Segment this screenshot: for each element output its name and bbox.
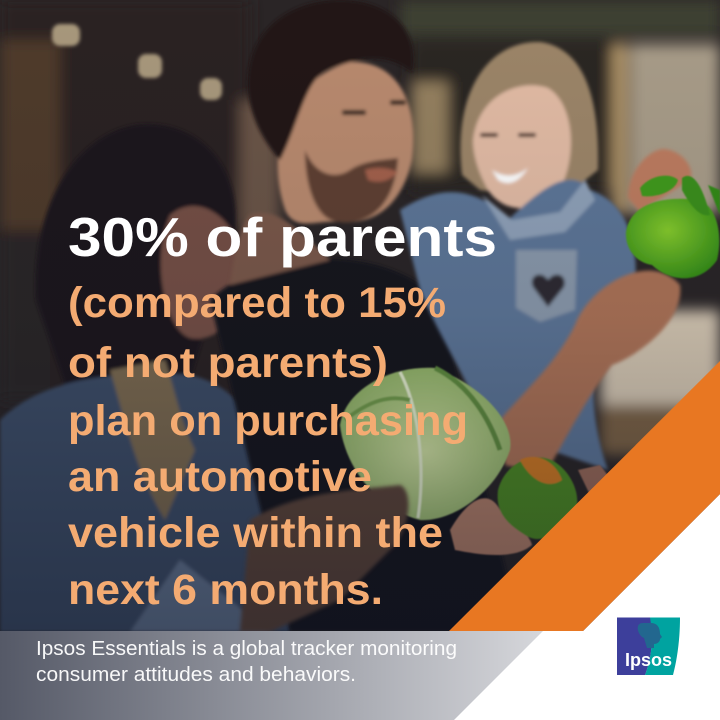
white lower right area	[440, 494, 720, 720]
subheading text	[68, 279, 468, 614]
man's arm	[500, 271, 680, 475]
cabbage	[340, 368, 510, 520]
man	[210, 0, 520, 632]
subheading text: plan on purchasing	[68, 397, 468, 445]
girl	[400, 42, 691, 470]
footer text	[36, 638, 457, 686]
headline: 30% of parents	[68, 206, 497, 268]
subheading text: (compared to 15%	[68, 279, 446, 327]
woman	[0, 124, 292, 632]
subheading text: vehicle within the	[68, 509, 443, 557]
hands and small pepper	[240, 457, 610, 632]
subheading text: an automotive	[68, 453, 372, 501]
Ipsos logo	[617, 618, 680, 675]
subheading text: next 6 months.	[68, 566, 383, 614]
photo background: ceiling lights	[52, 24, 222, 100]
footer text: consumer attitudes and behaviors.	[36, 664, 356, 686]
photo background: blurred shop interior	[0, 0, 720, 455]
footer text: Ipsos Essentials is a global tracker monitoring	[36, 638, 457, 660]
green pepper	[626, 176, 720, 278]
grey footer band	[0, 631, 543, 720]
logo icon: tree head	[638, 623, 662, 648]
Ipsos logo: Ipsos	[625, 650, 672, 670]
orange diagonal band	[449, 361, 720, 631]
subheading text: of not parents)	[68, 339, 388, 387]
